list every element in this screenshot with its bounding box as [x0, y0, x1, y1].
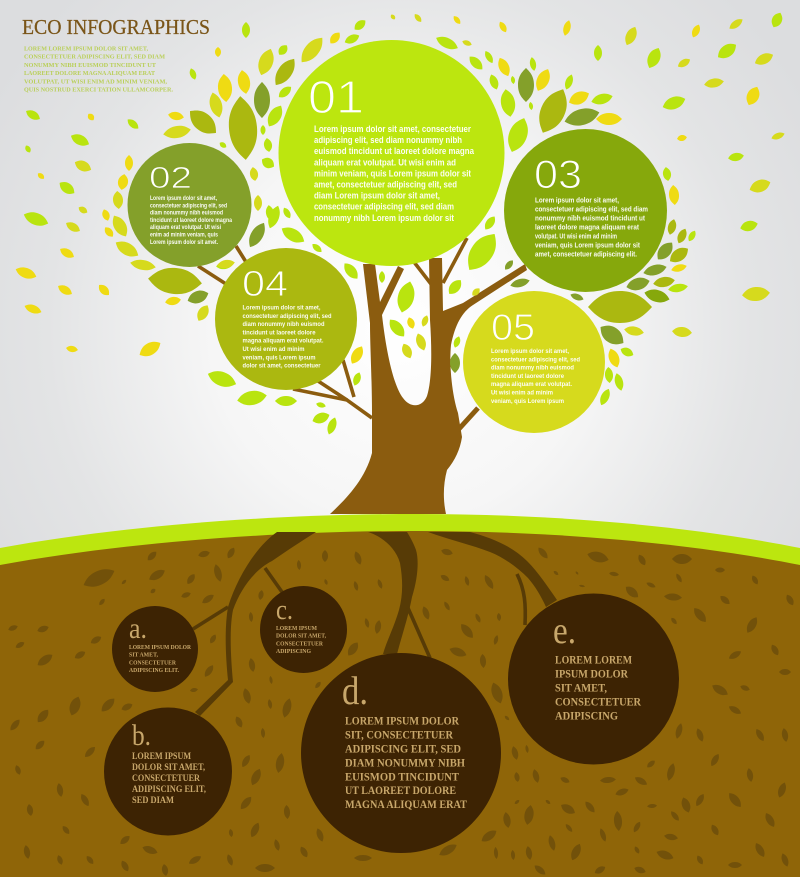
text block 01: adipiscing elit, sed diam nonummy nibh	[314, 135, 462, 146]
panel: d	[301, 653, 501, 853]
text block d: ADIPISCING ELIT, SED	[345, 743, 461, 755]
text block 04: dolor sit amet, consectetuer	[242, 363, 321, 370]
text block a	[129, 644, 191, 674]
intro text: CONSECTETUER ADIPISCING ELIT, SED DIAM	[24, 54, 165, 61]
text block a: SIT AMET,	[129, 652, 158, 659]
text block 02: Lorem ipsum dolor sit amet,	[150, 196, 217, 202]
text block 04: Lorem ipsum dolor sit amet,	[242, 304, 321, 312]
text block b: CONSECTETUER	[132, 773, 201, 784]
leaves: yellow	[14, 15, 763, 369]
text block 04: tincidunt ut laoreet dolore	[242, 329, 316, 336]
text block 05: Lorem ipsum dolor sit amet,	[491, 348, 569, 355]
text block 02: diam nonummy nibh euismod	[150, 211, 223, 217]
text block 03: veniam, quis Lorem ipsum dolor sit	[535, 240, 640, 250]
panel: c	[260, 586, 347, 673]
panel: 03	[504, 129, 667, 292]
text block 05: Ut wisi enim ad minim	[491, 390, 553, 396]
leaves: dark green	[186, 68, 677, 373]
text block 05: magna aliquam erat volutpat.	[491, 381, 572, 388]
text block b: ADIPISCING ELIT,	[132, 784, 206, 795]
text block 03	[535, 196, 648, 258]
number 05: 05	[491, 307, 535, 348]
intro text: LOREM LOREM IPSUM DOLOR SIT AMET,	[24, 46, 148, 52]
text block e: ADIPISCING	[555, 710, 618, 722]
heading: title and intro	[22, 15, 210, 94]
text block e	[555, 655, 642, 722]
number 01: 01	[308, 71, 364, 123]
text block 04	[242, 304, 332, 370]
letter c: c.	[276, 595, 293, 626]
intro text: QUIS NOSTRUD EXERCI TATION ULLAMCORPER.	[24, 86, 173, 94]
text block 04: diam nonummy nibh euismod	[242, 321, 324, 328]
text block c: LOREM IPSUM	[276, 625, 317, 632]
text block 02	[150, 196, 233, 246]
text block 01: minim veniam, quis Lorem ipsum dolor sit	[314, 168, 472, 179]
text block d: LOREM IPSUM DOLOR	[345, 716, 460, 728]
leaves: lime	[22, 11, 785, 436]
text block b: SED DIAM	[132, 795, 174, 806]
leaves: yellow-green	[64, 13, 786, 360]
text block 05: tincidunt ut laoreet dolore	[491, 373, 564, 380]
letter a: a.	[129, 612, 147, 645]
number 04: 04	[242, 263, 288, 304]
intro text	[24, 46, 173, 94]
text block 03: volutpat. Ut wisi enim ad minim	[535, 232, 617, 240]
text block 05: veniam, quis Lorem ipsum	[491, 398, 564, 405]
panel: 01	[278, 40, 504, 266]
text block 04: consectetuer adipiscing elit, sed	[242, 313, 332, 320]
text block 02: enim ad minim veniam, quis	[150, 232, 219, 238]
intro text: NONUMMY NIBH EUISMOD TINCIDUNT UT	[24, 62, 157, 69]
text block 01: euismod tincidunt ut laoreet dolore magna	[314, 146, 475, 157]
text block 01: Lorem ipsum dolor sit amet, consectetuer	[314, 124, 471, 135]
text block a: CONSECTETUER	[129, 659, 176, 666]
text block 04: veniam, quis Lorem ipsum	[242, 354, 316, 361]
ground: lime band	[0, 514, 800, 600]
text block 03: consectetuer adipiscing elit, sed diam	[535, 204, 648, 214]
text block 03: laoreet dolore magna aliquam erat	[535, 222, 639, 232]
text block d: MAGNA ALIQUAM ERAT	[345, 799, 467, 811]
panel: 05	[463, 291, 605, 433]
panel: 04	[215, 248, 357, 390]
text block b	[132, 751, 206, 806]
letter e: e.	[553, 610, 576, 652]
text block a: ADIPISCING ELIT.	[129, 667, 179, 674]
text block b: DOLOR SIT AMET,	[132, 762, 205, 773]
text block 01: diam Lorem ipsum dolor sit amet,	[314, 191, 440, 202]
text block d: SIT, CONSECTETUER	[345, 730, 454, 742]
tree trunk and branches	[198, 238, 527, 514]
text block c	[276, 625, 326, 655]
text block 04: Ut wisi enim ad minim	[242, 346, 304, 353]
number 03: 03	[534, 153, 582, 197]
text block 03: Lorem ipsum dolor sit amet,	[535, 196, 619, 204]
ground: brown soil	[0, 531, 800, 877]
text block 01: amet, consectetuer adipiscing elit, sed	[314, 180, 457, 190]
text block d: EUISMOD TINCIDUNT	[345, 771, 459, 783]
text block 05: diam nonummy nibh euismod	[491, 365, 574, 372]
text block 01: aliquam erat volutpat. Ut wisi enim ad	[314, 157, 456, 168]
text block e: LOREM LOREM	[555, 655, 632, 667]
text block 01: nonummy nibh Lorem ipsum dolor sit	[314, 213, 455, 224]
panel: b	[104, 708, 232, 836]
intro text: LAOREET DOLORE MAGNA ALIQUAM ERAT	[24, 70, 156, 77]
title: ECO INFOGRAPHICS	[22, 15, 210, 39]
number 02: 02	[149, 160, 192, 195]
leaves: olive	[147, 55, 691, 323]
text block e: IPSUM DOLOR	[555, 669, 629, 681]
text block 02: tincidunt ut laoreet dolore magna	[150, 218, 233, 224]
text block 05: consectetuer adipiscing elit, sed	[491, 356, 580, 363]
text block c: CONSECTETUER	[276, 640, 323, 647]
panel: e	[508, 594, 679, 764]
text block 02: consectetuer adipiscing elit, sed	[150, 203, 227, 209]
text block 04: magna aliquam erat volutpat.	[242, 338, 324, 345]
text block d: DIAM NONUMMY NIBH	[345, 757, 465, 769]
letter d: d.	[342, 668, 368, 713]
text block 05	[491, 348, 580, 405]
text block a: LOREM IPSUM DOLOR	[129, 644, 191, 651]
text block 03: amet, consectetuer adipiscing elit.	[535, 250, 637, 258]
text block d	[345, 716, 467, 811]
letter b: b.	[132, 719, 151, 752]
text block d: UT LAOREET DOLORE	[345, 785, 456, 797]
text block b: LOREM IPSUM	[132, 751, 191, 762]
text block e: CONSECTETUER	[555, 696, 642, 708]
text block 02: Lorem ipsum dolor sit amet.	[150, 240, 218, 246]
text block c: ADIPISCING	[276, 648, 311, 655]
text block 01: consectetuer adipiscing elit, sed diam	[314, 202, 454, 213]
panel: a	[112, 606, 198, 692]
panel: 02	[128, 143, 252, 267]
roots	[193, 532, 557, 716]
text block 01	[314, 124, 475, 224]
text block c: DOLOR SIT AMET,	[276, 633, 326, 640]
text block e: SIT AMET,	[555, 683, 607, 695]
intro text: VOLUTPAT, UT WISI ENIM AD MINIM VENIAM,	[24, 78, 167, 85]
text block 03: nonummy nibh euismod tincidunt ut	[535, 214, 645, 222]
soil leaves	[7, 546, 796, 877]
text block 02: aliquam erat volutpat. Ut wisi	[150, 225, 221, 231]
